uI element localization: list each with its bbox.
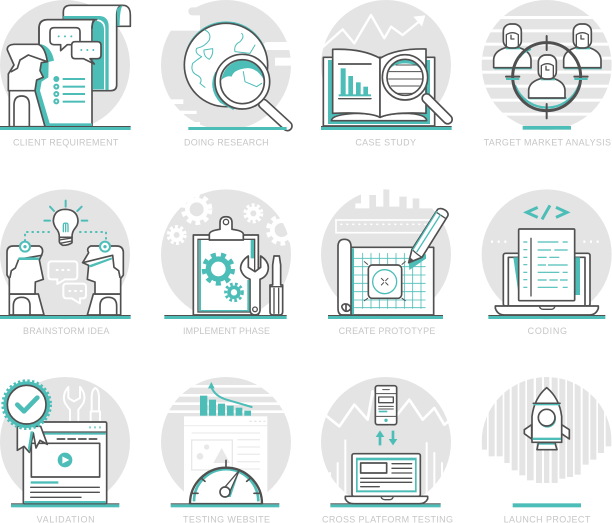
browser window <box>23 422 107 504</box>
panel: launch project <box>482 377 611 523</box>
panel: validation <box>0 377 130 523</box>
background circle <box>161 189 291 319</box>
baseline <box>488 315 605 319</box>
baseline <box>0 315 131 319</box>
background circle with skyline <box>321 187 451 319</box>
label: TARGET MARKET ANALYSIS <box>484 137 611 147</box>
background circle with pattern <box>321 377 451 496</box>
panel: cross platform testing <box>321 377 453 523</box>
label: DOING RESEARCH <box>184 137 269 147</box>
background circle <box>321 0 451 130</box>
baseline <box>11 503 119 507</box>
dotted connectors <box>25 232 106 241</box>
panel: target market analysis <box>479 0 612 147</box>
code document <box>519 229 575 301</box>
label: BRAINSTORM IDEA <box>23 326 109 336</box>
background circle <box>0 0 130 130</box>
person silhouette <box>7 44 54 127</box>
award badge <box>3 381 50 452</box>
baseline <box>321 126 452 130</box>
panel: create prototype <box>321 187 451 336</box>
sync arrows <box>376 430 397 445</box>
background circle <box>482 189 612 319</box>
baseline <box>164 315 287 319</box>
speedometer gauge <box>190 460 262 504</box>
magnifying glass <box>215 54 287 126</box>
panel: testing website <box>160 377 293 523</box>
bar chart with trend arrow <box>200 382 252 416</box>
label: CREATE PROTOTYPE <box>339 326 435 336</box>
back scroll document <box>63 5 130 91</box>
background circle <box>0 377 130 507</box>
trend arrow <box>323 15 425 47</box>
panel: implement phase <box>161 189 295 336</box>
baseline <box>328 315 443 319</box>
laptop <box>345 454 428 504</box>
white dots <box>491 238 603 245</box>
phone <box>375 386 397 425</box>
panel: doing research <box>157 0 295 147</box>
code brackets <box>527 205 567 219</box>
baseline <box>330 503 441 507</box>
man left <box>7 242 44 315</box>
speech bubble <box>50 28 80 51</box>
panel: client requirement <box>0 0 131 147</box>
rocket <box>524 388 569 450</box>
white gears <box>168 196 295 243</box>
striped background circle <box>161 377 291 492</box>
panel: case study <box>321 0 452 147</box>
wrench <box>241 256 268 315</box>
label: IMPLEMENT PHASE <box>183 326 270 336</box>
label: CLIENT REQUIREMENT <box>13 137 119 147</box>
laptop <box>495 253 598 315</box>
clipboard <box>193 217 258 315</box>
panel: coding <box>482 189 612 336</box>
label: CASE STUDY <box>355 137 416 147</box>
prototype square <box>364 262 405 301</box>
globe <box>184 21 268 110</box>
magnifying glass <box>382 55 448 119</box>
man right <box>83 242 123 315</box>
target reticle <box>506 36 588 118</box>
baseline <box>188 127 287 130</box>
pencil <box>409 209 448 270</box>
striped background circle <box>479 0 612 130</box>
blueprint sheet <box>346 247 434 315</box>
teal gears <box>204 255 242 301</box>
baseline <box>0 126 131 130</box>
white speech bubbles <box>48 261 86 303</box>
front document with checklist <box>39 20 104 127</box>
faded website <box>184 416 267 504</box>
background circle <box>0 189 130 319</box>
paper roll <box>338 239 351 315</box>
striped background circle <box>157 0 295 130</box>
label: CODING <box>528 326 567 336</box>
person left <box>494 24 532 69</box>
light bulb <box>44 201 87 245</box>
baseline <box>513 503 581 507</box>
screwdriver <box>270 256 283 315</box>
open book <box>323 49 435 126</box>
baseline <box>171 503 279 507</box>
baseline <box>523 126 571 130</box>
speech bubble <box>72 42 101 64</box>
striped background <box>482 377 611 483</box>
person right <box>564 24 602 69</box>
white tools <box>64 387 100 420</box>
panel: brainstorm idea <box>0 189 131 336</box>
person center <box>529 55 567 99</box>
